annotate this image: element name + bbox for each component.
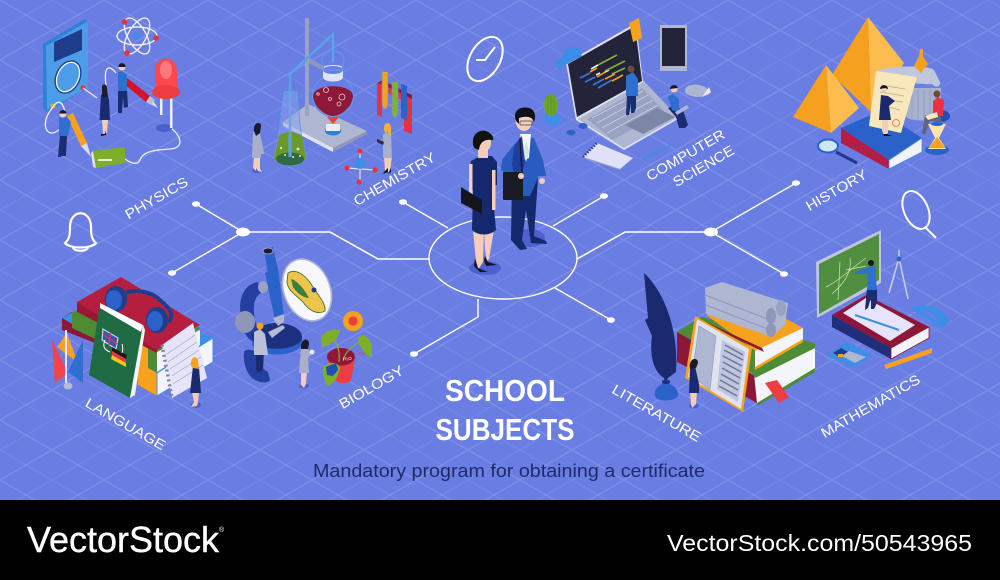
image url: VectorStock.com/50543965	[667, 530, 972, 556]
column ruin	[876, 66, 941, 120]
title: SUBJECTS	[436, 412, 574, 447]
hourglass	[925, 122, 949, 155]
figure: blonde woman	[190, 357, 201, 408]
cell magnified view	[274, 252, 340, 328]
figure: woman in lab coat	[299, 340, 314, 388]
flags	[52, 330, 83, 390]
large pyramid	[832, 17, 904, 112]
stacked books	[62, 277, 213, 396]
magnifier	[818, 140, 857, 163]
figure: man in lab coat	[254, 322, 268, 373]
phone	[660, 25, 687, 71]
orange pen	[67, 113, 91, 157]
label: language: LANGUAGE	[83, 394, 169, 453]
label: biology: BIOLOGY	[336, 362, 407, 412]
label: physics: PHYSICS	[122, 173, 191, 222]
burner	[325, 115, 341, 136]
panel: computer science illustration	[544, 18, 711, 170]
usb devices	[566, 123, 588, 135]
code lines on screen	[580, 55, 625, 88]
compass tool	[889, 250, 908, 299]
figure: blonde woman	[377, 123, 392, 174]
label: mathematics: MATHEMATICS	[818, 371, 923, 441]
icon: bell	[65, 213, 96, 251]
panel: biology illustration	[235, 247, 372, 388]
german flag	[111, 347, 127, 367]
subtitle: Mandatory program for obtaining a certificate	[313, 460, 705, 481]
pencil	[642, 146, 670, 160]
laptop	[566, 23, 678, 150]
LED bulb	[152, 58, 180, 132]
panel: physics illustration	[43, 14, 180, 168]
panel: literature illustration	[644, 273, 815, 412]
glass tube	[290, 34, 333, 150]
ink bottle	[655, 380, 678, 400]
multimeter	[43, 19, 88, 112]
book stack	[677, 315, 815, 406]
central figures: woman and man	[461, 108, 547, 275]
round flask	[312, 51, 354, 116]
molecule	[344, 148, 378, 185]
headphones	[105, 286, 171, 333]
sun	[343, 311, 363, 331]
figure: seated man in red	[922, 90, 950, 134]
uk flag	[102, 329, 118, 349]
potted plant	[321, 329, 372, 386]
label: chemistry: CHEMISTRY	[351, 149, 439, 209]
notepad	[583, 143, 633, 170]
label: science: SCIENCE	[670, 142, 737, 190]
cloud icon	[556, 47, 582, 69]
watermark band	[0, 500, 1000, 580]
connector lines and central ellipse	[168, 180, 800, 357]
scrolls	[705, 282, 788, 337]
panel: history illustration	[793, 17, 950, 169]
icon: atom	[117, 14, 159, 58]
figure: man with orange pen	[58, 110, 71, 157]
wires	[45, 68, 180, 163]
figure: man with red pen	[118, 63, 128, 113]
figure: woman in grey coat	[252, 123, 264, 173]
title	[436, 373, 574, 447]
woman in navy dress	[461, 131, 497, 272]
label: history: HISTORY	[803, 166, 870, 214]
scroll	[869, 71, 917, 133]
potted plant: H₂O	[343, 356, 352, 361]
spiral notebook	[162, 323, 207, 398]
figure: woman reading scroll	[879, 85, 895, 136]
label: computer: COMPUTER	[643, 126, 727, 184]
small pyramid	[793, 65, 859, 133]
registered mark: ®	[219, 526, 225, 534]
protractor	[910, 305, 949, 329]
open book	[685, 316, 752, 412]
cactus	[544, 94, 561, 125]
calculator	[826, 342, 872, 368]
conical flask	[274, 91, 306, 166]
battery	[91, 147, 125, 168]
man in blue suit	[501, 108, 547, 250]
green dictionary	[89, 303, 145, 398]
sticky note	[629, 18, 642, 42]
figure: teacher at board	[855, 260, 877, 310]
book	[841, 111, 922, 169]
test tube rack	[377, 72, 412, 134]
quill	[644, 273, 676, 382]
label: literature: LITERATURE	[609, 381, 704, 445]
title: SCHOOL	[445, 373, 565, 408]
figure shadows	[469, 229, 545, 275]
mouse	[685, 85, 711, 97]
microscope	[235, 247, 302, 382]
bookmark	[765, 380, 789, 403]
panel: mathematics illustration	[816, 230, 949, 369]
book with notebook	[832, 295, 929, 359]
figure: woman in navy dress	[100, 84, 110, 136]
potted plant: CO₂	[358, 351, 366, 356]
brand name: VectorStock	[27, 519, 220, 560]
red pen	[119, 74, 158, 108]
figure: woman with dark hair	[689, 359, 699, 408]
icon: magnifying glass outline	[897, 187, 936, 238]
panel: language illustration	[52, 277, 213, 408]
panel: chemistry illustration	[252, 18, 412, 185]
vase	[914, 48, 928, 73]
chalkboard	[816, 230, 881, 318]
figure: man standing on laptop	[626, 66, 638, 115]
lab stand	[283, 18, 367, 152]
ruler	[884, 348, 932, 369]
icon: clock	[460, 31, 510, 87]
figure: seated man with tablet	[668, 85, 689, 128]
